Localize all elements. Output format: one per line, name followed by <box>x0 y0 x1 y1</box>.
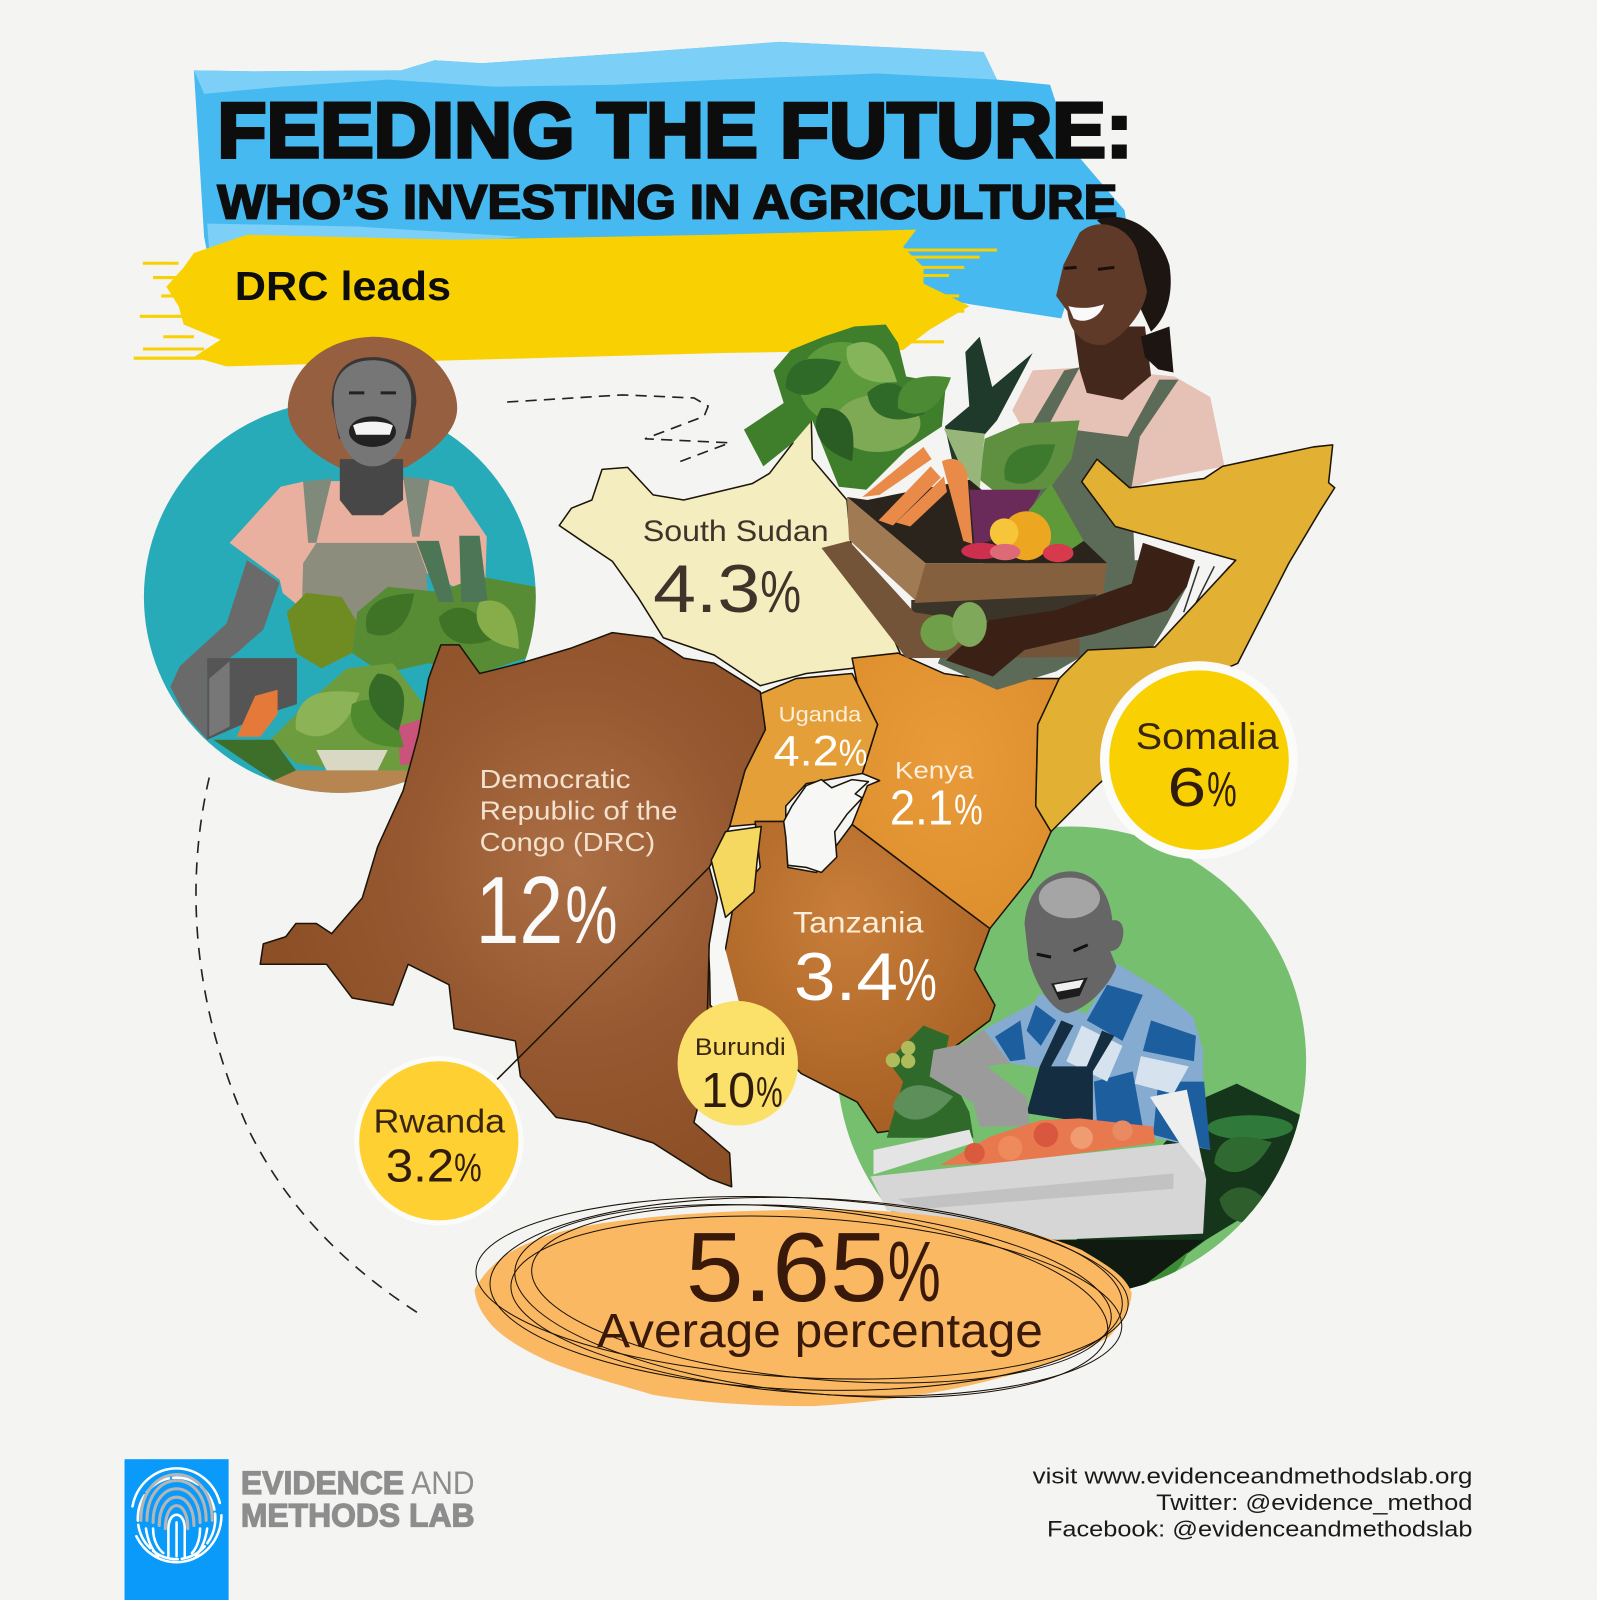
label: Uganda: % <box>839 732 867 773</box>
label: Tanzania: % <box>898 946 937 1013</box>
icon: leaves right <box>1029 484 1084 556</box>
footer contact text: Twitter: @evidence_method <box>1156 1490 1472 1515</box>
icon: arm <box>946 543 1195 677</box>
logo block <box>125 1459 229 1600</box>
green circle <box>837 827 1306 1296</box>
callout: Somalia: Somalia <box>1136 716 1279 757</box>
label: Tanzania: Tanzania <box>793 907 924 940</box>
label: Uganda: 4.2 <box>774 727 839 775</box>
title line 1: FEEDING THE FUTURE: <box>217 88 1133 174</box>
value: 5.65 <box>686 1212 888 1322</box>
title brush background <box>194 42 1129 318</box>
icon: crate interior <box>847 480 1107 563</box>
icon: crate lower slat <box>821 541 1080 658</box>
icon: peppers and radishes <box>961 511 1074 562</box>
icon: crate back <box>874 1130 974 1174</box>
map <box>260 418 1061 1187</box>
callout: average percentage <box>471 1179 1133 1423</box>
icon: head <box>1025 871 1123 1013</box>
icon: roots <box>1184 566 1230 612</box>
title line 2: WHO’S INVESTING IN AGRICULTURE <box>217 176 1117 229</box>
map: Lake Victoria <box>784 780 868 872</box>
callout: Burundi: Burundi <box>695 1034 786 1061</box>
teal circle <box>144 401 536 793</box>
icon: beet leaves <box>980 420 1080 500</box>
icon: eyes <box>1037 945 1088 957</box>
icon: hat shade <box>332 357 416 439</box>
logo text: AND <box>411 1464 475 1501</box>
icon: face <box>334 360 411 466</box>
icon: dark corn leaves <box>945 353 1033 469</box>
callout: Rwanda <box>354 1056 524 1226</box>
logo text: METHODS LAB <box>241 1497 475 1534</box>
icon: tomatoes <box>940 1118 1155 1165</box>
icon: neck <box>1074 327 1151 400</box>
icon: arm <box>170 560 280 740</box>
label: South Sudan: South Sudan <box>643 515 829 548</box>
label: Tanzania: 3.4 <box>794 940 898 1015</box>
map: South Sudan <box>559 418 900 686</box>
icon: straps <box>303 477 430 543</box>
blob <box>475 1210 1132 1406</box>
photo: man with tomato crate <box>870 871 1303 1294</box>
map: Uganda <box>730 673 878 827</box>
icon: neck <box>340 459 403 515</box>
icon: left foliage <box>886 1026 974 1138</box>
icon: scalp highlight <box>1039 878 1100 918</box>
label: Kenya: Kenya <box>895 758 974 785</box>
map: Kenya <box>852 653 1061 929</box>
callout: Rwanda: % <box>454 1147 482 1191</box>
photo: woman with crate <box>744 217 1230 690</box>
icon: crate front <box>914 563 1107 603</box>
logo <box>125 1459 475 1600</box>
icon: arm <box>930 1030 1030 1127</box>
icon: carrot <box>237 690 278 737</box>
label: South Sudan <box>643 515 829 627</box>
icon: fingerprint <box>132 1468 221 1562</box>
label: South Sudan: 4.3 <box>653 552 760 627</box>
subtitle brush <box>134 230 997 366</box>
brush streaks <box>134 250 997 358</box>
callout: Burundi: % <box>756 1069 783 1117</box>
callout: Burundi <box>678 1001 798 1126</box>
callout: Burundi: 10 <box>701 1064 755 1118</box>
label: DRC: Congo (DRC) <box>480 829 655 857</box>
scribble <box>471 1179 1133 1423</box>
icon: hair <box>1097 217 1171 332</box>
callout: average percentage: % <box>888 1224 941 1320</box>
label: Kenya: % <box>954 786 983 834</box>
subtitle: DRC leads <box>235 263 451 309</box>
icon: shirt <box>1012 367 1225 487</box>
icon: hat <box>288 337 457 469</box>
title <box>217 88 1133 229</box>
map: border line <box>707 944 709 1020</box>
icon: green leaf <box>920 602 987 651</box>
icon: tray <box>274 770 408 793</box>
callout: Somalia: 6 <box>1167 756 1206 818</box>
map: Rwanda and Burundi <box>711 827 761 917</box>
dashed arc <box>196 778 418 1313</box>
icon: crate <box>207 658 297 740</box>
icon: crate upper side <box>847 497 926 603</box>
label: DRC <box>476 766 678 964</box>
callout: Somalia: % <box>1207 763 1237 817</box>
icon: face <box>1056 224 1147 345</box>
icon: apron bib <box>302 542 428 621</box>
footer contact text: Facebook: @evidenceandmethodslab <box>1047 1517 1472 1542</box>
label: DRC: Republic of the <box>480 797 678 825</box>
callout: Rwanda: 3.2 <box>386 1140 454 1192</box>
icon: mouth <box>1051 978 1088 1000</box>
label: Kenya <box>890 758 983 835</box>
label: Uganda: Uganda <box>779 702 861 726</box>
label: Tanzania <box>793 907 937 1015</box>
map: Somalia <box>1036 445 1335 832</box>
footer contact text <box>1033 1464 1472 1542</box>
icon: eyes <box>349 391 396 394</box>
footer contact text: visit www.evidenceandmethodslab.org <box>1033 1464 1472 1489</box>
icon: beet stems <box>969 490 1041 546</box>
map: Lake Tanganyika <box>709 918 753 1036</box>
label: DRC: 12 <box>476 857 563 964</box>
icon: apron <box>938 367 1195 690</box>
map: Rwanda leader line <box>497 867 709 1080</box>
icon: crate front <box>870 1090 1206 1240</box>
label: DRC: % <box>565 870 617 961</box>
label: DRC: Democratic <box>480 766 631 794</box>
icon: carrots <box>862 447 972 544</box>
dashed squiggle arrow <box>507 395 730 463</box>
icon: shirt <box>230 480 487 612</box>
callout: Rwanda: Rwanda <box>374 1104 505 1141</box>
icon: greens <box>213 536 541 781</box>
map: Tanzania <box>725 821 995 1133</box>
label: South Sudan: % <box>760 558 801 625</box>
icon: crate gap <box>911 594 1097 624</box>
icon: ponytail <box>1141 327 1174 372</box>
icon: leafy greens <box>744 324 1080 500</box>
map: Democratic Republic of the Congo <box>260 633 765 1187</box>
logo text <box>241 1464 475 1534</box>
icon: crate post <box>1150 1090 1204 1173</box>
label: Uganda <box>774 702 867 775</box>
icon: plaid shirt <box>984 963 1210 1150</box>
callout: Somalia <box>1100 661 1298 859</box>
icon: foliage right <box>1074 1084 1303 1294</box>
icon: apron <box>1027 1020 1114 1123</box>
label: Kenya: 2.1 <box>890 781 953 835</box>
caption: Average percentage <box>597 1305 1043 1358</box>
logo text: EVIDENCE <box>241 1464 404 1501</box>
icon: eyes <box>1064 267 1114 269</box>
photo: woman with hat <box>170 337 541 796</box>
icon: mouth <box>349 416 396 447</box>
icon: smile <box>1068 304 1104 321</box>
